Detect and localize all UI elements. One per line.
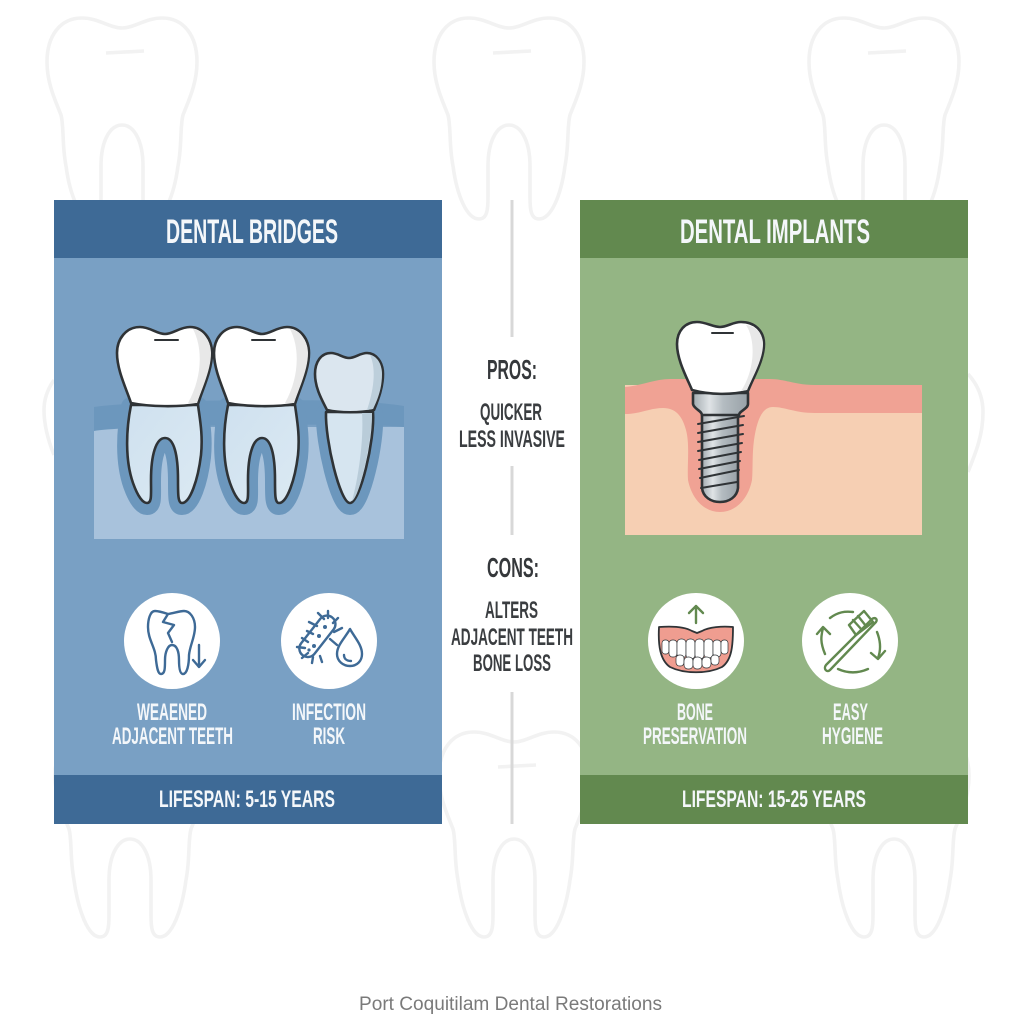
header bar bbox=[580, 200, 968, 258]
lifespan text: LIFESPAN: 15-25 YEARS bbox=[682, 786, 866, 813]
cons list bbox=[451, 597, 573, 677]
heading: dental bridges: DENTAL BRIDGES bbox=[166, 213, 338, 251]
pros heading: PROS: bbox=[487, 354, 537, 385]
footer credit: Port Coquitilam Dental Restorations bbox=[359, 994, 662, 1015]
pros list bbox=[459, 399, 565, 453]
label: easy hygiene: EASY bbox=[833, 699, 868, 726]
label: infection risk bbox=[292, 699, 366, 750]
header bar bbox=[54, 200, 442, 258]
heading: dental implants: DENTAL IMPLANTS bbox=[680, 213, 870, 251]
label: bone preservation: BONE bbox=[677, 699, 713, 726]
panel body bbox=[54, 200, 442, 824]
cons heading: CONS: bbox=[487, 552, 539, 583]
label: weakened adjacent teeth: ADJACENT TEETH bbox=[112, 723, 233, 750]
implant crown bbox=[677, 322, 764, 394]
label: bone preservation bbox=[643, 699, 747, 750]
label: weakened adjacent teeth: WEAENED bbox=[137, 699, 207, 726]
label: easy hygiene: HYGIENE bbox=[822, 723, 883, 750]
illustration: bridge teeth bbox=[94, 327, 404, 539]
panel body bbox=[580, 200, 968, 824]
footer bar: lifespan bbox=[580, 775, 968, 824]
pros list: LESS INVASIVE bbox=[459, 426, 565, 453]
icon: weakened tooth bbox=[124, 593, 220, 689]
illustration: implant bbox=[625, 322, 922, 535]
panel: dental bridges bbox=[54, 200, 442, 824]
pros list: QUICKER bbox=[480, 399, 542, 426]
tooth 1 bbox=[117, 327, 212, 503]
lifespan text: LIFESPAN: 5-15 YEARS bbox=[159, 786, 335, 813]
icon: easy hygiene bbox=[802, 593, 898, 689]
label: infection risk: RISK bbox=[313, 723, 345, 750]
icon: bone preservation bbox=[648, 593, 744, 689]
footer bar: lifespan bbox=[54, 775, 442, 824]
cons list: ADJACENT TEETH bbox=[451, 624, 573, 651]
cons list: ALTERS bbox=[485, 597, 538, 624]
label: bone preservation: PRESERVATION bbox=[643, 723, 747, 750]
label: infection risk: INFECTION bbox=[292, 699, 366, 726]
center column: pros and cons bbox=[451, 200, 573, 824]
cons list: BONE LOSS bbox=[473, 650, 551, 677]
tooth 2 bbox=[214, 327, 309, 503]
label: weakened adjacent teeth bbox=[112, 699, 233, 750]
implant screw bbox=[693, 393, 748, 502]
tooth 3 bbox=[315, 353, 383, 503]
icon: infection risk bbox=[281, 593, 377, 689]
label: easy hygiene bbox=[822, 699, 883, 750]
panel: dental implants bbox=[580, 200, 968, 824]
